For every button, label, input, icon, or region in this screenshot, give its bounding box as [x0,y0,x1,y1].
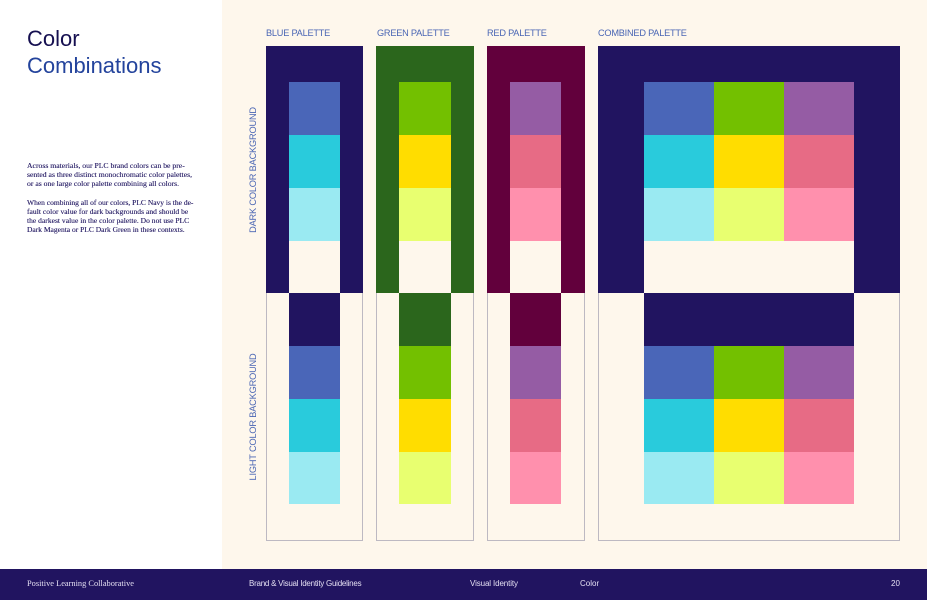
footer: subsection: Color [580,579,599,588]
text block: intro [27,161,192,188]
text block: navy usage [26,198,194,234]
footer: page number: 20 [891,579,900,588]
footer bar [0,569,927,600]
dark swatches [289,82,340,293]
footer: organization: Positive Learning Collaborative [27,578,134,588]
text block: intro: sented as three distinct monochromatic color palettes, [27,170,192,179]
panel: combined palette [598,46,900,541]
text block: navy usage: Dark Magenta or PLC Dark Green in these contexts. [27,225,185,234]
light swatches [399,293,451,504]
panel: green palette [376,46,474,541]
text block: navy usage: fault color value for dark backgrounds and should be [27,207,188,216]
light background [598,293,900,541]
dark swatches [399,82,451,293]
text block: intro: Across materials, our PLC brand colors can be pre- [27,161,185,170]
footer: document title: Brand & Visual Identity Guidelines [249,579,361,588]
dark swatches [510,82,561,293]
heading: red palette: RED PALETTE [487,28,547,38]
text block: navy usage: When combining all of our colors, PLC Navy is the de- [27,198,193,206]
title: Color [27,26,80,51]
title: Combinations [27,53,162,78]
heading: combined palette: COMBINED PALETTE [598,28,687,38]
light background [487,293,585,541]
text block: navy usage: the darkest value in the color palette. Do not use PLC [27,216,189,225]
dark background [376,46,474,293]
light background [266,293,363,541]
light swatches [644,293,854,504]
axis label: dark background: DARK COLOR BACKGROUND [248,107,258,232]
background panel [222,0,927,569]
axis label: light background: LIGHT COLOR BACKGROUND [248,354,258,480]
panel: red palette [487,46,585,541]
footer: section: Visual Identity [470,579,518,588]
dark background [487,46,585,293]
heading: green palette: GREEN PALETTE [377,28,450,38]
panel: blue palette [266,46,363,541]
light swatches [289,293,340,504]
dark background [266,46,363,293]
title [27,26,162,78]
dark background [598,46,900,293]
light background [376,293,474,541]
dark swatches [644,82,854,293]
light swatches [510,293,561,504]
heading: blue palette: BLUE PALETTE [266,28,330,38]
text block: intro: or as one large color palette combining all colors. [27,179,179,188]
